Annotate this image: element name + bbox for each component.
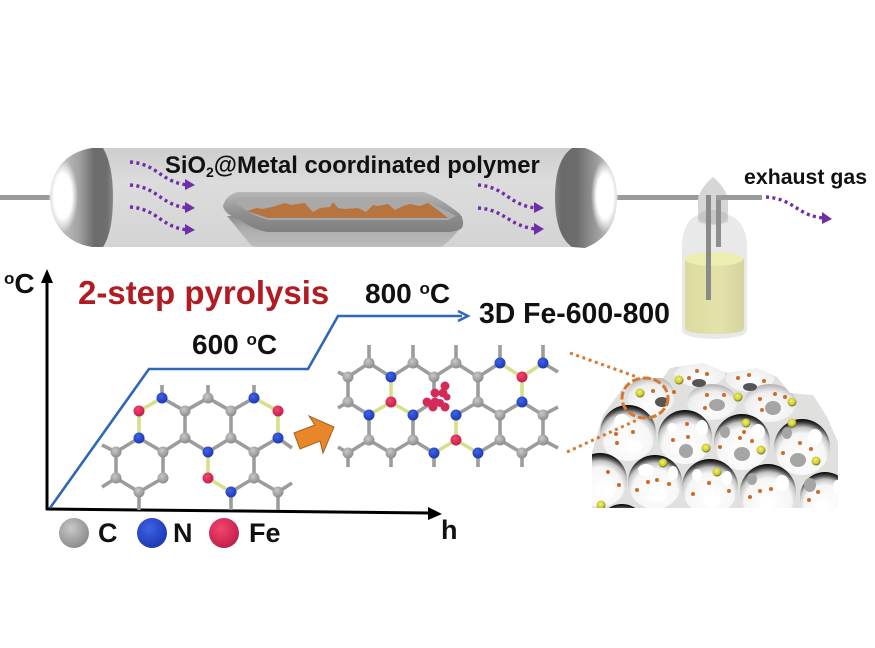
liquid [685, 254, 744, 334]
carbon [59, 518, 89, 548]
tube label: @Metal coordinated polymer [214, 152, 540, 179]
tray front wall [227, 216, 462, 247]
y axis [46, 280, 48, 510]
zoom leader lines [567, 353, 637, 452]
grey holes [679, 399, 816, 492]
tube label: SiO [165, 152, 206, 179]
orange dots [606, 369, 820, 502]
600 label: C [257, 329, 277, 360]
sample tray [223, 192, 463, 247]
outlet rod [616, 195, 709, 200]
y axis label: o [4, 269, 14, 288]
product label: 3D Fe-600-800 [479, 298, 670, 330]
iron cluster [422, 382, 450, 412]
800 label: o [420, 279, 430, 298]
legend: N [173, 518, 192, 548]
neck overlap [698, 210, 728, 224]
tray inner [236, 197, 456, 220]
legend [59, 518, 281, 548]
right end cap [555, 148, 617, 248]
600 label: 600 [192, 329, 239, 360]
purple gas arrows right [478, 185, 544, 235]
heading: 2-step pyrolysis [78, 274, 329, 311]
profile arrowhead [458, 311, 468, 321]
inlet rod [0, 195, 55, 200]
molecule 600 [102, 385, 292, 510]
bottle neck [698, 177, 728, 225]
dark top holes [655, 379, 757, 407]
long tube [706, 195, 711, 300]
porous carbon foam [592, 363, 838, 508]
legend: C [98, 518, 118, 548]
tube label: 2 [206, 164, 214, 180]
molecule 800 [338, 345, 558, 467]
liquid surface [685, 252, 743, 266]
tube furnace [0, 148, 709, 248]
bottle body [682, 212, 747, 339]
600 label: o [246, 330, 257, 349]
gas wash bottle [682, 177, 762, 339]
heating profile [50, 316, 462, 508]
orange process arrow [294, 416, 334, 453]
legend: Fe [249, 518, 281, 548]
exit rod [716, 195, 762, 200]
nitrogen [137, 518, 167, 548]
x arrowhead [428, 507, 442, 520]
quartz tube body [100, 148, 575, 247]
800 label: C [430, 278, 450, 309]
800 label: 800 [365, 278, 412, 309]
yellow particles [596, 376, 820, 510]
deep pores [592, 405, 838, 508]
purple gas arrows left [130, 162, 195, 235]
left highlight [48, 159, 78, 233]
temperature chart [41, 269, 468, 520]
iron [209, 518, 239, 548]
shallow top pores [627, 357, 796, 422]
tray rim [223, 192, 463, 232]
powder sample [247, 202, 448, 218]
dashed highlight circle [622, 378, 668, 418]
x axis [46, 509, 430, 513]
right highlight [591, 159, 619, 233]
y axis label: C [14, 268, 35, 299]
x axis label: h [441, 515, 458, 545]
exhaust label: exhaust gas [744, 165, 867, 189]
short tube [716, 195, 721, 247]
y arrowhead [41, 269, 53, 283]
left end cap [50, 148, 113, 247]
exhaust arrow [766, 197, 832, 224]
white holes [614, 414, 838, 491]
